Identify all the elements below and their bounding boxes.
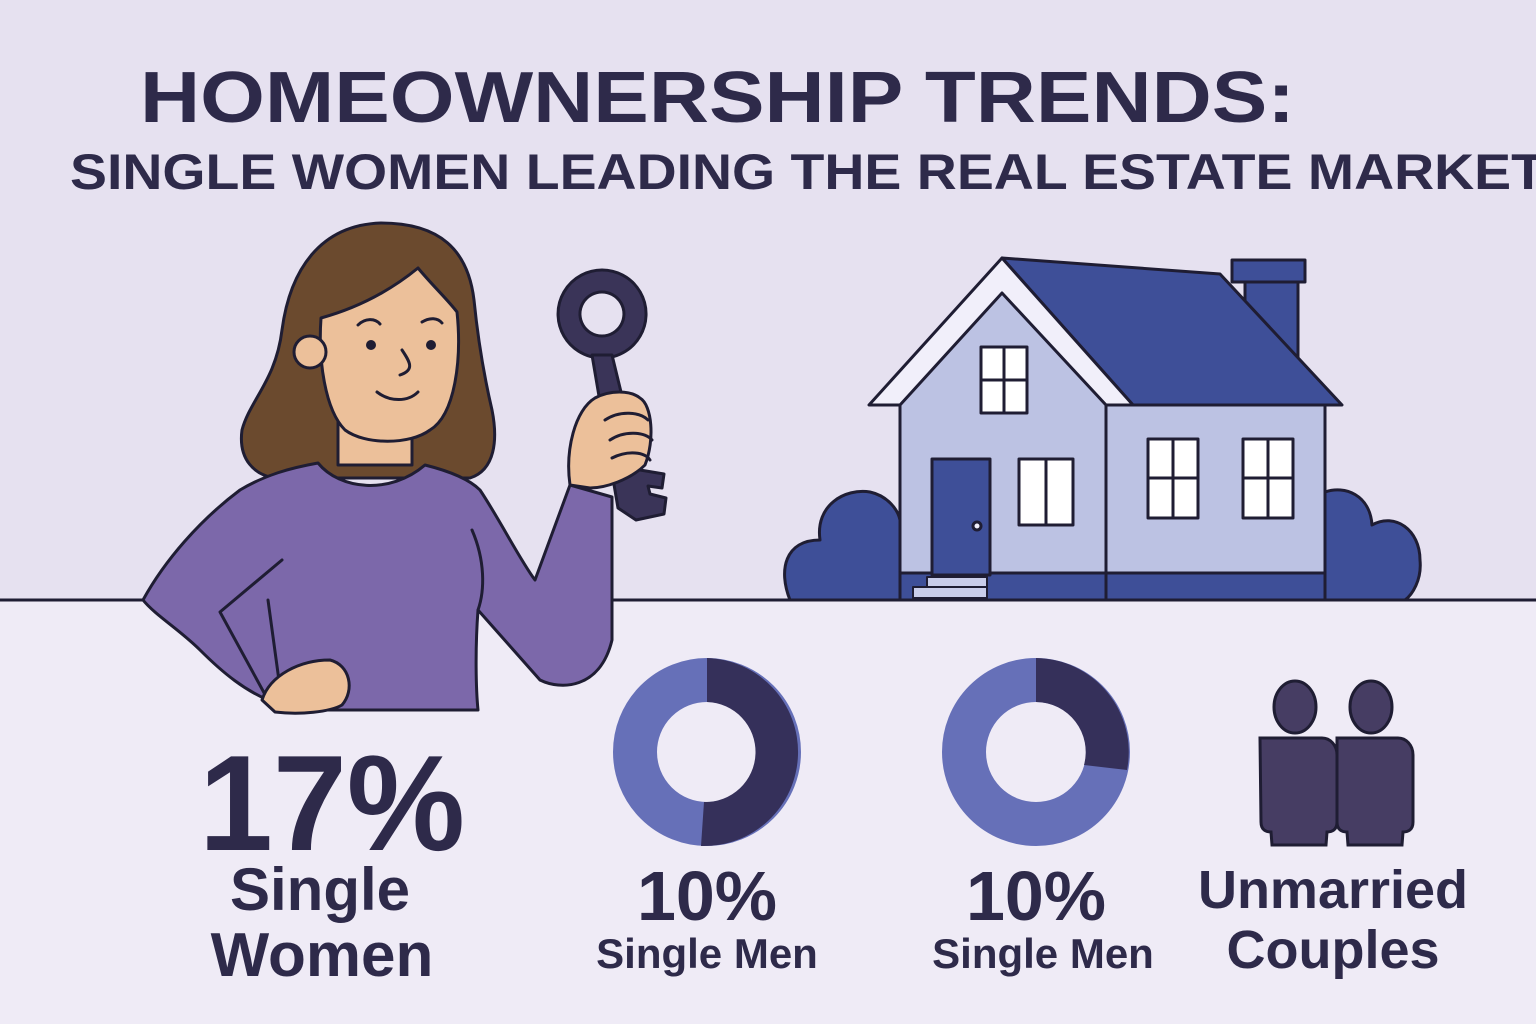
ear — [294, 336, 326, 368]
raised hand — [569, 392, 651, 488]
eyes — [366, 340, 376, 350]
stat: 17% single women: 17% — [199, 727, 465, 879]
stat: 10% single men (2): Single Men — [932, 930, 1154, 977]
right wall — [1106, 405, 1325, 600]
neck — [338, 420, 412, 465]
ground line — [0, 598, 1536, 602]
subtitle: SINGLE WOMEN LEADING THE REAL ESTATE MARKET — [70, 144, 1536, 200]
donut chart 1 — [635, 658, 798, 846]
gable band — [869, 258, 1133, 405]
title: HOMEOWNERSHIP TRENDS: — [140, 58, 1295, 138]
front wall — [900, 293, 1106, 600]
donut chart 2 — [964, 658, 1129, 824]
bush right — [1325, 490, 1420, 600]
hair — [241, 223, 495, 478]
steps — [927, 577, 987, 587]
chimney — [1245, 282, 1298, 362]
icon: couple — [1260, 681, 1413, 845]
stat: 17% single women: Women — [211, 921, 433, 990]
stat: 10% single men (1): 10% — [637, 857, 777, 935]
key — [558, 270, 666, 520]
stat: 10% single men (1): Single Men — [596, 930, 818, 977]
door — [932, 459, 990, 575]
face — [320, 268, 459, 441]
bush left — [785, 491, 900, 600]
roof — [1002, 258, 1342, 405]
stat: 17% single women — [199, 727, 465, 990]
hand on hip — [262, 660, 349, 713]
illustration: woman with key — [143, 223, 666, 713]
title — [70, 58, 1536, 200]
stat: 10% single men (1) — [596, 857, 818, 977]
label: unmarried couples: Unmarried — [1198, 860, 1468, 920]
stat: 10% single men (2) — [932, 857, 1154, 977]
windows — [981, 347, 1293, 525]
label: unmarried couples — [1198, 860, 1468, 980]
illustration: house — [785, 258, 1420, 600]
base band — [900, 573, 1325, 600]
label: unmarried couples: Couples — [1226, 920, 1440, 980]
stat: 17% single women: Single — [230, 856, 410, 923]
shirt body and arms — [143, 463, 612, 710]
stat: 10% single men (2): 10% — [966, 857, 1106, 935]
